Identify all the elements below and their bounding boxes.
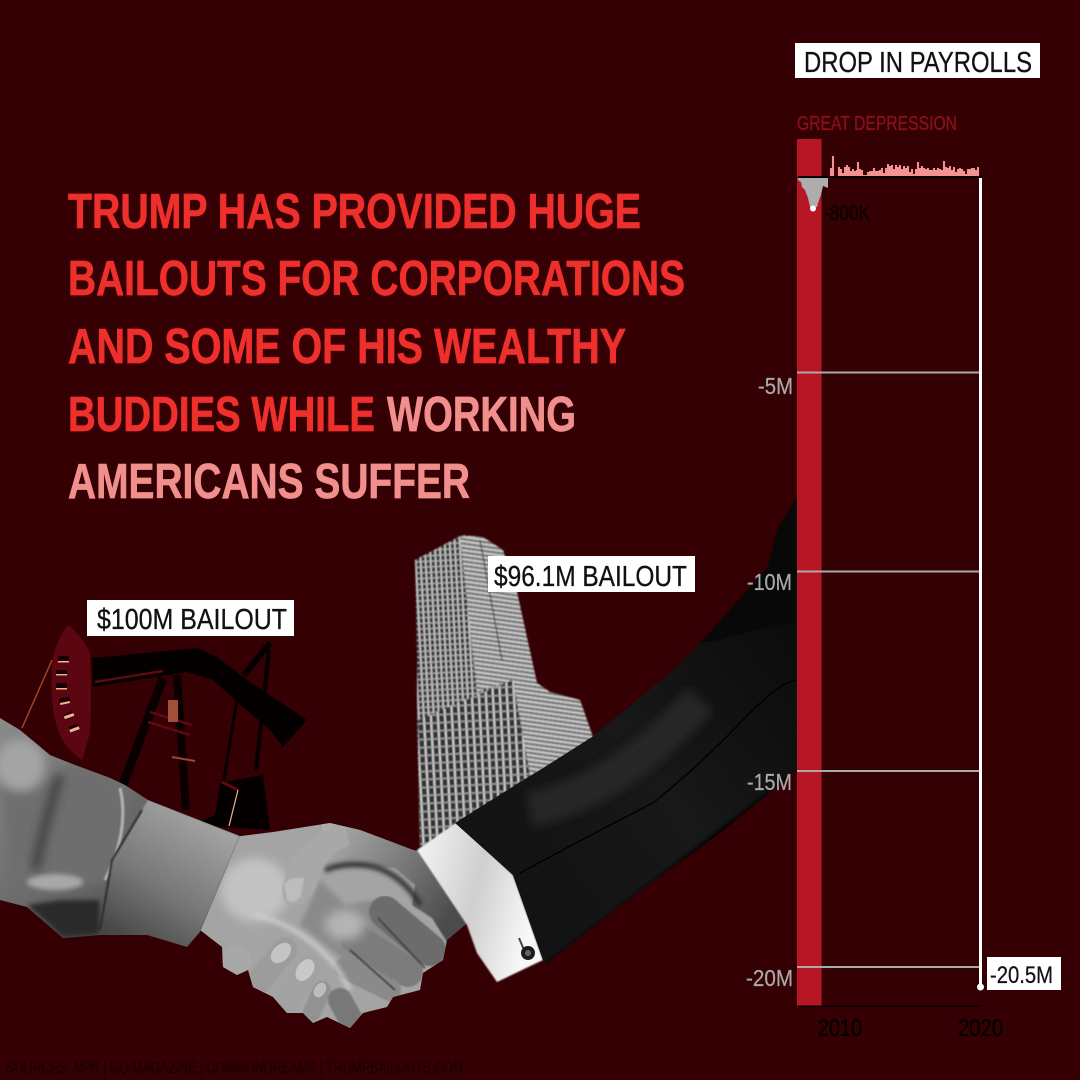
icon: oil pump jack [22,625,307,830]
icon: skyscraper [415,535,593,848]
title: TRUMP HAS PROVIDED HUGE [68,185,641,239]
label: $96.1M bailout: $96.1M BAILOUT [494,561,687,593]
icon: cufflink [519,938,535,960]
label: great depression: GREAT DEPRESSION [797,113,957,135]
y axis labels: -10M [747,569,792,595]
right sleeve [450,490,800,970]
gridlines [797,372,979,967]
label: -800K: -800K [824,202,870,225]
marker: -800K [810,206,816,212]
label: -20.5M: -20.5M [990,962,1053,989]
y axis labels: -20M [746,965,793,991]
marker: -20.5M [977,984,984,990]
illustration: handshake [0,490,800,1035]
heading: drop in payrolls: DROP IN PAYROLLS [804,47,1032,79]
y axis labels: -5M [758,373,793,399]
2020 drop line [979,178,982,987]
x axis labels [818,1015,1003,1042]
hands [200,823,467,1028]
title: BUDDIES WHILE [68,388,375,442]
y axis labels: -15M [747,769,792,795]
sources: SOURCES: NPR | GQ MAGAZINE | COMMONDREAMS | TRUMPBAILOUTS.COM [6,1058,463,1077]
bottom axis [798,1006,981,1007]
label: $100M bailout: $100M BAILOUT [97,604,287,636]
baseline [798,176,982,178]
title: WORKING [387,388,576,442]
left sleeve [0,718,240,947]
x axis labels: 2020 [958,1015,1003,1042]
2008 recession losses [798,178,828,207]
title [68,185,685,509]
great depression band [797,139,822,1006]
positive monthly bars [831,156,978,176]
title: AMERICANS SUFFER [68,455,470,509]
bar chart: drop in payrolls [797,139,984,1007]
title: BAILOUTS FOR CORPORATIONS [68,252,685,306]
y axis labels [746,373,793,991]
title: AND SOME OF HIS WEALTHY [68,320,626,374]
x axis labels: 2010 [818,1015,862,1042]
right cuff [417,822,543,982]
